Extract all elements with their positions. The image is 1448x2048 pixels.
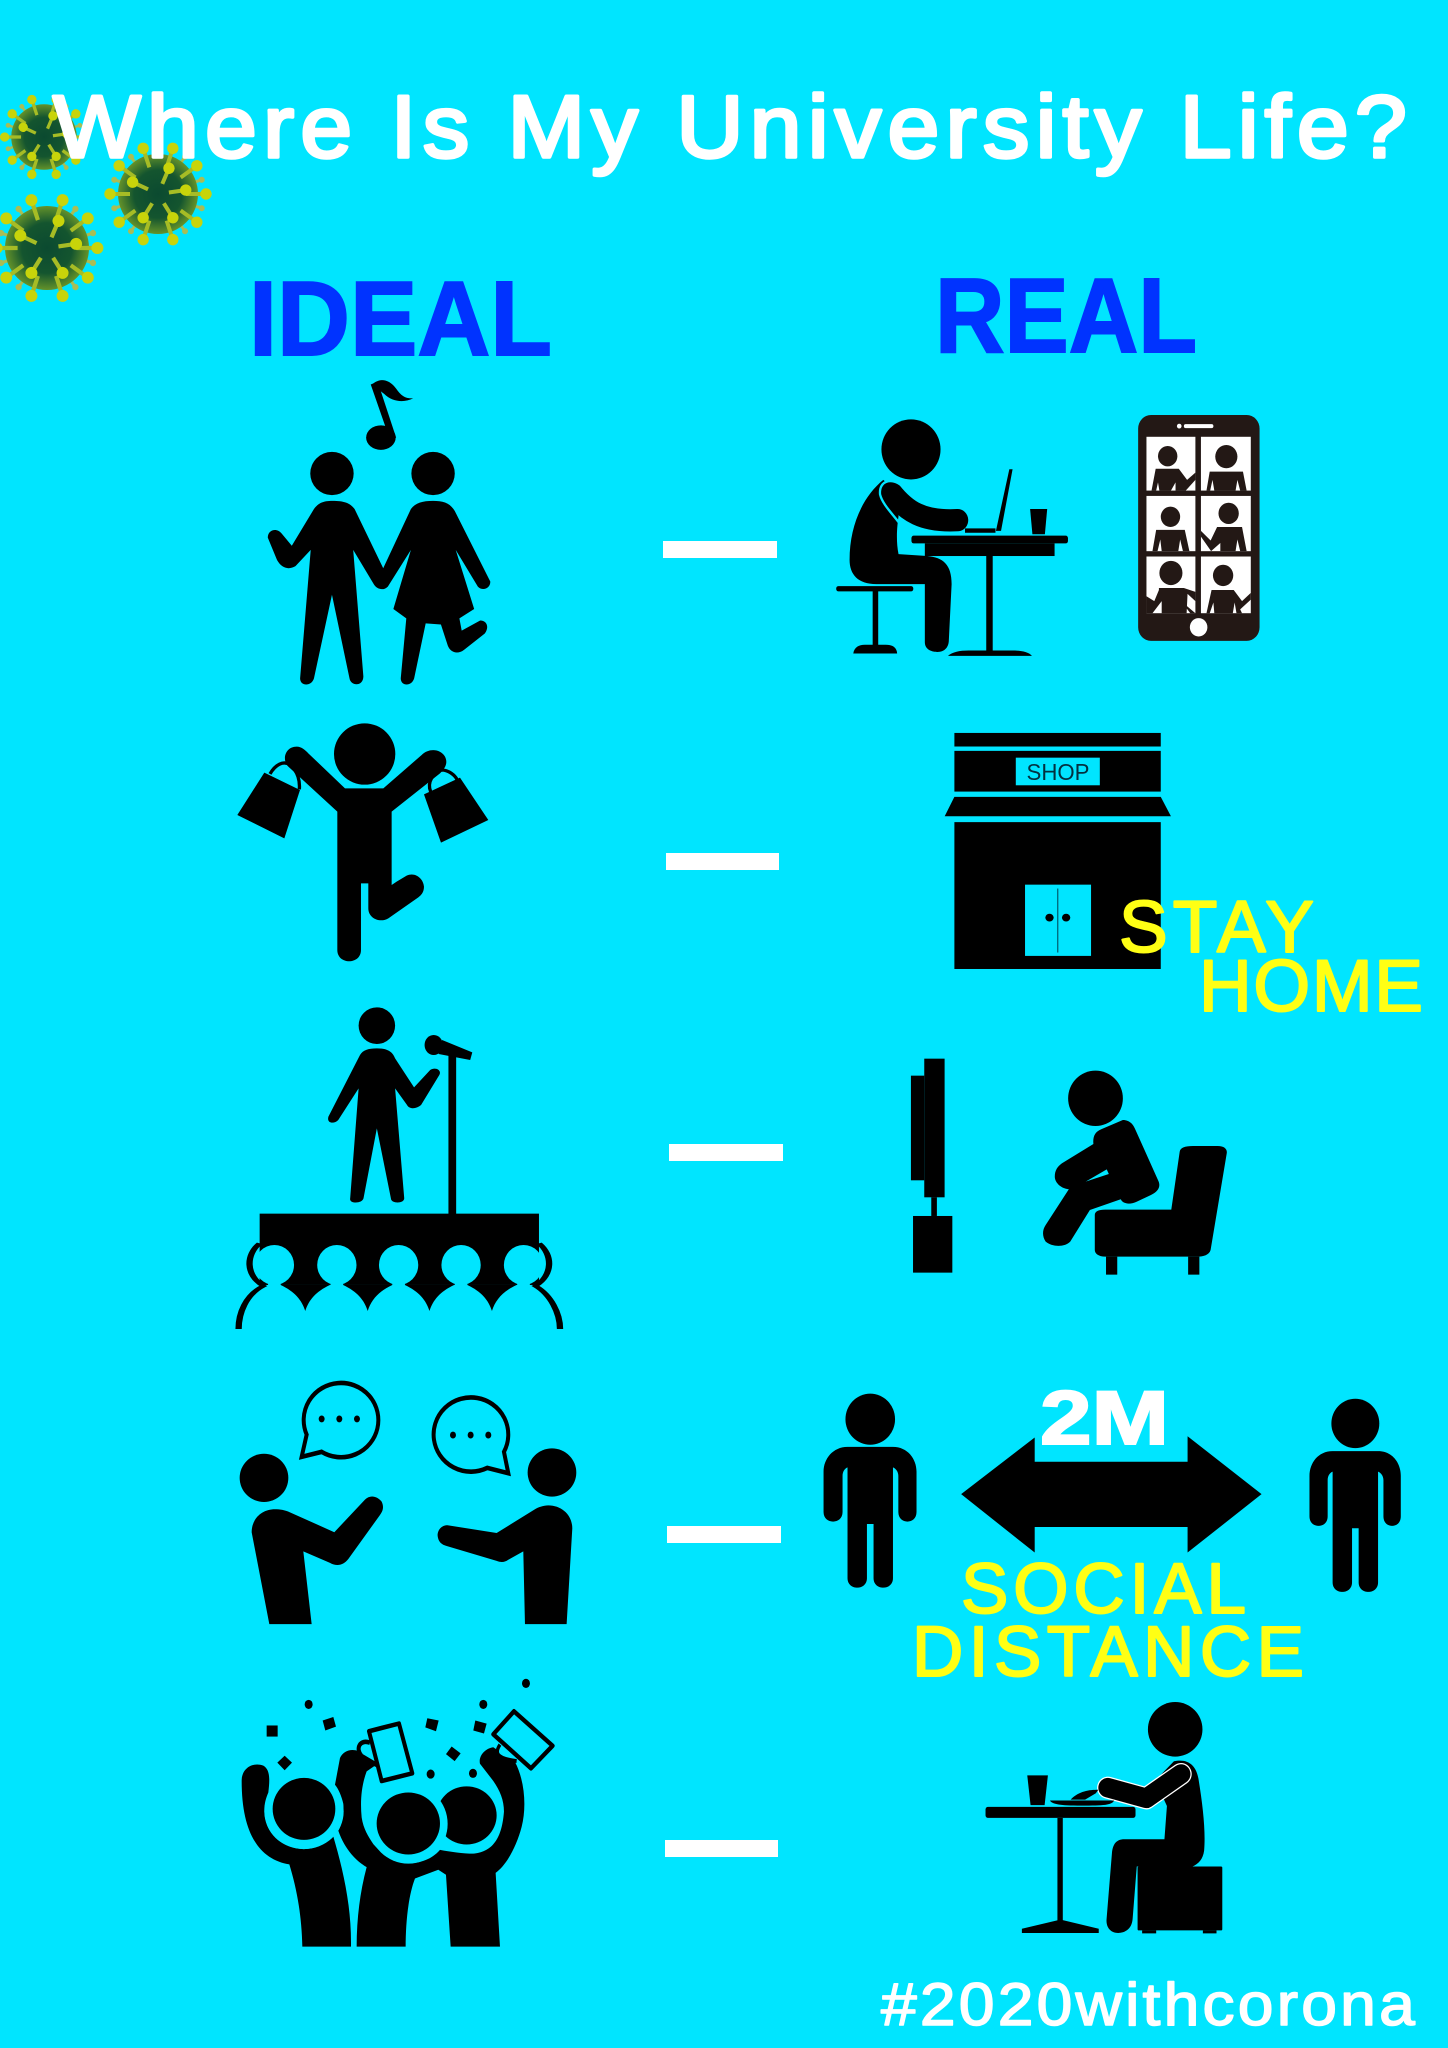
shop sign label: SHOP: [1026, 759, 1090, 785]
caption: stay home: HOME: [1199, 946, 1423, 1027]
caption: social distance: SOCIAL: [961, 1550, 1246, 1629]
icon: coronavirus cluster: [0, 94, 212, 303]
dash: row 5: [665, 1840, 778, 1857]
caption: stay home: [1119, 887, 1423, 1027]
icon: two people talking with speech bubbles: [240, 1383, 576, 1624]
title: Where Is My University Life?: [53, 77, 1413, 176]
icon: person eating alone at table: [986, 1702, 1222, 1933]
heading: IDEAL: IDEAL: [249, 260, 552, 378]
icon: shopping person with bags: [237, 723, 488, 961]
icon: person on sofa: [1043, 1071, 1227, 1275]
dash: row 3: [669, 1144, 783, 1161]
icon: closed shop: [945, 733, 1171, 969]
hashtag: #2020withcorona: [881, 1971, 1418, 2038]
icon: singer on stage with audience: [239, 1007, 560, 1329]
dash: row 1: [663, 541, 777, 558]
heading: REAL: REAL: [935, 257, 1197, 375]
icon: student on laptop at table: [836, 419, 1068, 656]
label: 2M: 2M: [1040, 1376, 1169, 1461]
dash: row 4: [667, 1526, 781, 1543]
icon: phone with video call grid: [1138, 415, 1260, 641]
icon: couple holding hands with music note: [268, 380, 490, 685]
dash: row 2: [666, 853, 779, 870]
caption: stay home: STAY: [1119, 887, 1314, 968]
caption: social distance: [912, 1550, 1304, 1692]
icon: two people two metres apart with arrow: [824, 1394, 1401, 1592]
icon: television: [911, 1059, 952, 1273]
icon: friends cheering with mugs: [242, 1679, 553, 1947]
caption: social distance: DISTANCE: [912, 1613, 1304, 1692]
